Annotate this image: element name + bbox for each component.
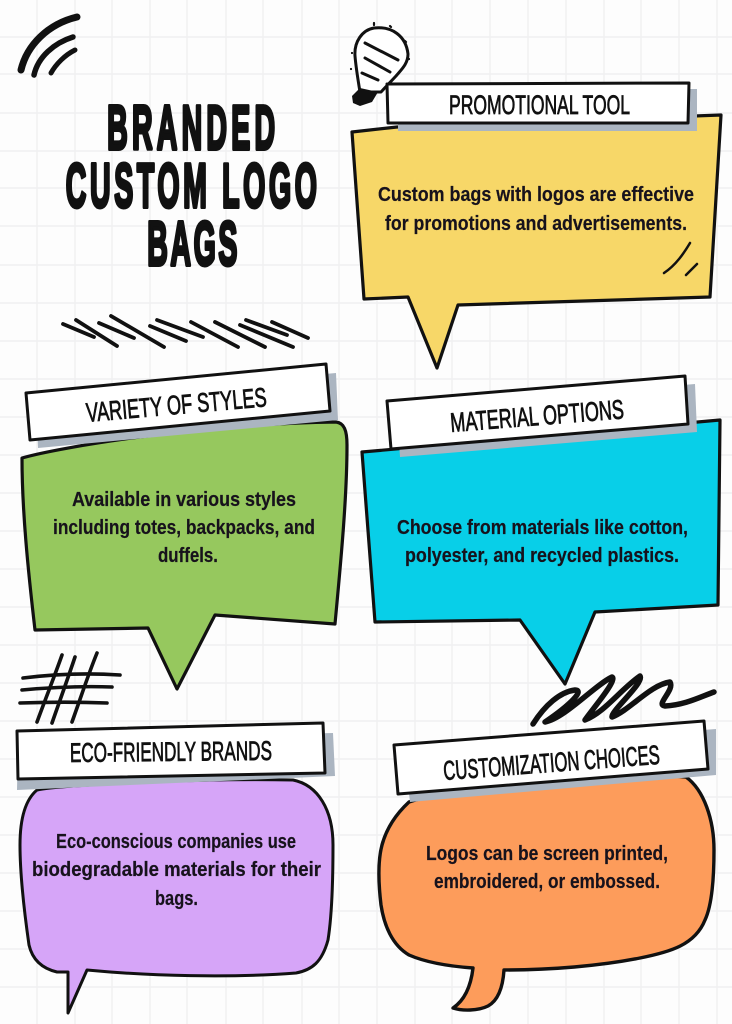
- title: BAGS: [147, 210, 237, 279]
- body text: [53, 489, 315, 567]
- orange speech bubble: [379, 775, 714, 1010]
- body text: [426, 843, 668, 893]
- label box: [387, 83, 689, 123]
- label box: [387, 376, 688, 449]
- accent ticks: [664, 243, 697, 275]
- body text: polyester, and recycled plastics.: [405, 545, 679, 567]
- body text: including totes, backpacks, and: [53, 517, 315, 539]
- panel: customization choices: [379, 721, 716, 1010]
- body text: Custom bags with logos are effective: [378, 184, 694, 206]
- heading: material options: MATERIAL OPTIONS: [449, 394, 625, 438]
- body text: Eco-conscious companies use: [56, 831, 296, 853]
- yellow speech bubble: [352, 115, 721, 368]
- body text: Available in various styles: [72, 489, 296, 511]
- body text: [32, 831, 321, 910]
- panel: eco-friendly brands: [17, 723, 335, 1013]
- body text: Choose from materials like cotton,: [397, 517, 688, 539]
- heading: promotional tool: PROMOTIONAL TOOL: [449, 90, 630, 120]
- purple speech bubble: [20, 780, 333, 1013]
- panel: material options: [362, 376, 720, 684]
- cyan speech bubble: [362, 420, 720, 684]
- heading: eco-friendly brands: ECO-FRIENDLY BRANDS: [70, 736, 272, 768]
- label box: [394, 721, 708, 794]
- title: CUSTOM LOGO: [66, 152, 317, 221]
- icon: hash scribble: [20, 653, 120, 723]
- label shadow: [398, 89, 697, 131]
- title: [66, 94, 317, 279]
- body text: [397, 517, 688, 567]
- green speech bubble: [22, 422, 347, 689]
- panel: variety of styles: [22, 364, 347, 689]
- label shadow: [36, 373, 338, 448]
- label box: [26, 364, 330, 440]
- label shadow: [17, 733, 335, 790]
- decorative hatch strokes: [63, 316, 308, 347]
- body text: [378, 184, 694, 235]
- icon: light bulb: [351, 23, 409, 106]
- label shadow: [397, 384, 697, 457]
- label shadow: [404, 729, 716, 802]
- body text: Logos can be screen printed,: [426, 843, 668, 865]
- body text: biodegradable materials for their: [32, 859, 321, 881]
- body text: embroidered, or embossed.: [434, 871, 660, 893]
- icon: zigzag scribble: [533, 676, 714, 724]
- body text: duffels.: [158, 545, 218, 567]
- label box: [17, 723, 325, 779]
- heading: variety of styles: VARIETY OF STYLES: [85, 382, 268, 428]
- body text: for promotions and advertisements.: [385, 213, 687, 235]
- title: BRANDED: [107, 94, 275, 163]
- body text: bags.: [155, 888, 198, 910]
- icon: curved signal arcs: [21, 17, 77, 75]
- panel: promotional tool: [352, 83, 721, 368]
